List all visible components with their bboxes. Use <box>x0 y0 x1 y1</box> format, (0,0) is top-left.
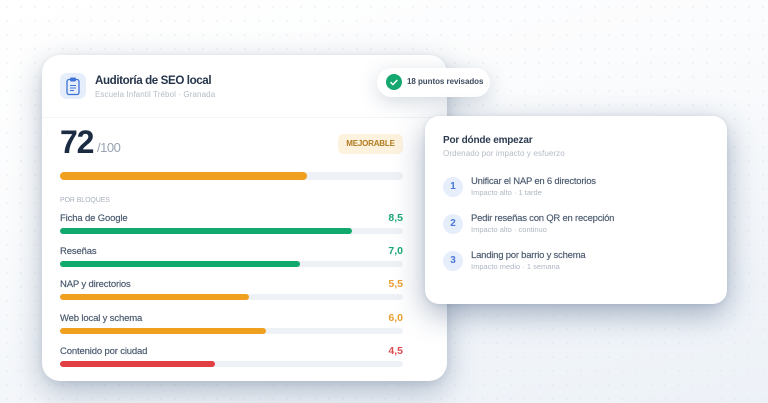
overall progress bar <box>60 172 403 180</box>
step 2: Impacto alto · continuo <box>471 225 547 234</box>
row: NAP y directorios: NAP y directorios <box>60 279 131 290</box>
subtitle: Escuela Infantil Trébol · Granada <box>95 90 215 99</box>
panel: por dónde empezar <box>425 116 727 304</box>
row: Reseñas: 7,0 <box>388 245 403 257</box>
icon: clipboard <box>60 73 86 99</box>
row: NAP y directorios: 5,5 <box>388 278 403 290</box>
badge: mejorable <box>338 134 403 154</box>
score: 72 <box>60 124 93 160</box>
row: Ficha de Google <box>60 212 403 234</box>
score <box>60 124 120 160</box>
score: /100 <box>97 140 120 155</box>
section label: POR BLOQUES <box>60 197 110 204</box>
row: Ficha de Google: Ficha de Google <box>60 213 127 224</box>
row: Reseñas: Reseñas <box>60 246 96 257</box>
panel heading: Por dónde empezar <box>443 135 532 146</box>
step 2: Pedir reseñas con QR en recepción <box>471 213 614 224</box>
badge: mejorable: MEJORABLE <box>346 139 395 148</box>
row: Web local y schema: Web local y schema <box>60 313 142 324</box>
step 3: Impacto medio · 1 semana <box>471 262 560 271</box>
row: Contenido por ciudad: 4,5 <box>388 345 403 357</box>
panel: audit card <box>42 55 447 381</box>
step 1 <box>443 176 596 197</box>
row: Contenido por ciudad <box>60 345 403 367</box>
icon: green check <box>386 74 402 90</box>
callout pill: 18 puntos revisados <box>377 68 490 97</box>
row: Web local y schema <box>60 312 403 334</box>
step 1: Unificar el NAP en 6 directorios <box>471 176 596 187</box>
pill label: 18 puntos revisados <box>407 77 483 86</box>
title: Auditoría de SEO local <box>95 74 211 87</box>
step 2 <box>443 213 614 234</box>
header divider <box>42 117 447 118</box>
step 3: Landing por barrio y schema <box>471 250 585 261</box>
row: Web local y schema: 6,0 <box>388 312 403 324</box>
row: Contenido por ciudad: Contenido por ciudad <box>60 346 147 357</box>
step 3: 3 <box>450 255 456 266</box>
step 3 <box>443 250 586 271</box>
row: Ficha de Google: 8,5 <box>388 212 403 224</box>
row: Reseñas <box>60 245 403 267</box>
row: NAP y directorios <box>60 278 403 300</box>
step 1: Impacto alto · 1 tarde <box>471 188 542 197</box>
panel subheading: Ordenado por impacto y esfuerzo <box>443 149 565 158</box>
step 2: 2 <box>450 218 456 229</box>
step 1: 1 <box>450 181 456 192</box>
